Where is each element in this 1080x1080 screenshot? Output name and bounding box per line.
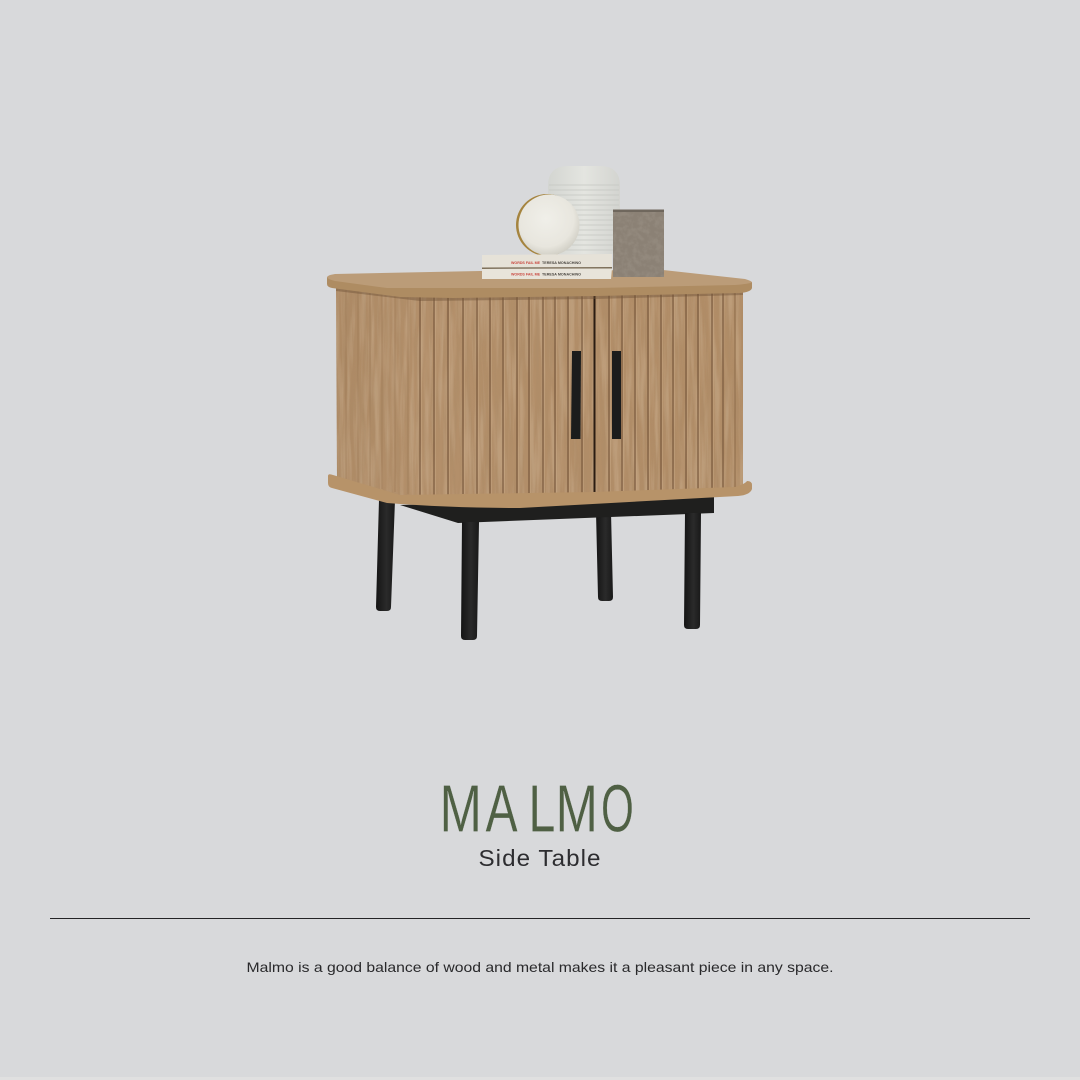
table top surface [327,270,752,288]
slat highlights [422,292,714,496]
decor: stacked books [482,254,612,279]
title: A [486,772,518,846]
door handle: left [571,351,581,439]
faint left slats [346,290,408,494]
door gap [594,292,596,496]
divider line [50,918,1030,919]
title: M [440,771,482,846]
title: O [601,770,634,846]
slat grooves [420,292,723,496]
decor: stacked books: WORDS FAIL ME [511,272,540,276]
table leg: back left [376,500,395,611]
table leg: front right [684,513,701,629]
bottom plate [328,474,752,508]
door handle: right [612,351,621,439]
product photo: side table [327,166,752,640]
title: L [528,772,555,846]
decor: ribbed glass vase [548,166,620,254]
subtitle: Side Table [478,845,602,871]
title: M [556,771,598,846]
metal under-frame [400,497,714,523]
book spine text: WORDS FAIL ME [511,260,540,265]
decor: stacked books: TERESA MONACHINO [542,260,581,265]
decor: stacked books: TERESA MONACHINO [542,272,581,276]
table top edge [327,277,752,298]
title [440,770,634,846]
table leg: front left [461,522,479,640]
decor: concrete block [613,210,664,277]
description: Malmo is a good balance of wood and metal makes it a pleasant piece in any space. [246,959,834,975]
table leg: back right [596,512,613,601]
cabinet body with slats [336,288,744,500]
decor: marble sphere with gold rim [516,194,580,256]
top shadow [336,288,743,301]
